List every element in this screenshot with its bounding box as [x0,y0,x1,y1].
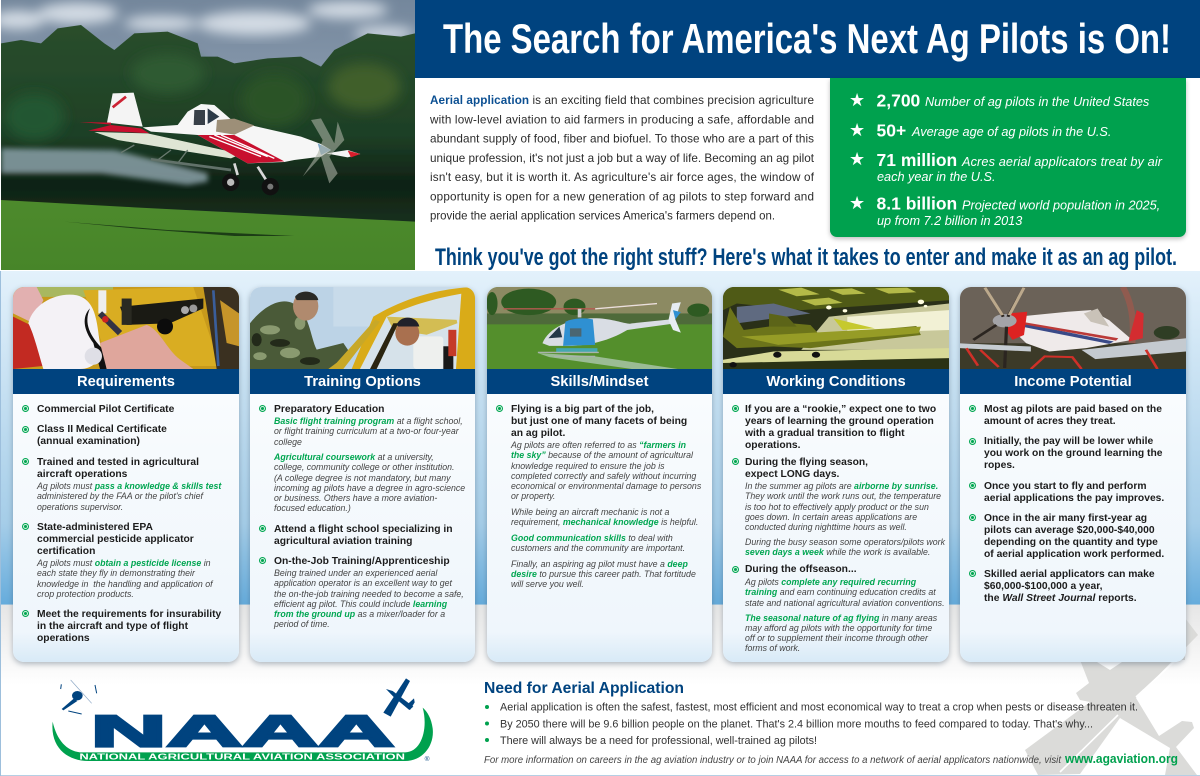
item: Once you start to fly and perform [984,480,1146,492]
item: Class II Medical Certificate [37,424,167,435]
item [969,480,1164,504]
item: an ag pilot. [511,428,565,438]
bullet list: There will always be a need for professional, well-trained ag pilots! [500,735,817,747]
item [732,456,868,480]
detail: desire to pursue this career path. That fortitude [511,569,696,579]
footer note: For more information on careers in the ag aviation industry or to join NAAA for access to a network of aerial applicators nationwide, visit [484,755,1062,766]
intro paragraph: Aerial application is an exciting field that combines precision agriculture [430,94,814,107]
item: Initially, the pay will be lower while [984,436,1153,447]
stat: 50+ [849,120,1111,141]
detail: Finally, an aspiring ag pilot must have a deep [511,558,688,568]
detail [36,481,222,512]
intro paragraph: with low-level aviation to aid farmers in producing a safe, affordable and [429,113,814,126]
heading: Working Conditions [766,374,906,390]
detail: or flight training curriculum at a two-or four-year [274,426,459,436]
detail [510,440,701,501]
detail: Being trained under an experienced aerial [274,568,437,578]
detail: each state they fly in demonstrating their [37,568,195,578]
item: expect LONG days. [745,468,839,480]
heading [250,369,475,394]
detail [511,532,685,553]
hero photo: ag plane spraying a field [1,0,415,270]
item: Flying is a big part of the job, [511,404,654,414]
detail: college [274,437,302,447]
detail: administered by the FAA or the pilot's chief [37,491,203,501]
detail: Ag pilots must obtain a pesticide license in [37,558,211,568]
intro paragraph: isn't easy, but it is worth it. As agriculture's air force ages, the window of [430,171,815,184]
heading: Need for Aerial Application [484,680,684,697]
detail [274,568,464,629]
detail: application operator is an excellent way to get [274,578,452,588]
item: you work on the ground learning the [984,448,1162,459]
detail: Ag pilots are often referred to as “farmers in [511,440,686,450]
item: Meet the requirements for insurability [37,608,221,620]
item: ropes. [984,460,1015,471]
stat: 71 million: Acres aerial applicators treat by air [961,155,1163,169]
stat: 2,700 [849,90,1150,111]
bullet list: Aerial application is often the safest, fastest, most efficient and most economical way to treat a crop when pests or disease threaten it. [500,702,1138,714]
item [969,404,1162,426]
item [496,404,687,438]
photo: hangar with planes [723,287,949,369]
photo: helicopter spraying [487,287,712,369]
item: operations [37,632,90,644]
item: agricultural aviation training [274,536,412,546]
item: but just one of many facets of being [511,416,687,426]
detail [511,507,698,527]
item: the Wall Street Journal reports. [984,592,1137,604]
item: If you are a “rookie,” expect one to two [745,404,936,414]
detail: knowledge required to ensure the job is [511,461,665,471]
detail: The seasonal nature of ag flying in many areas [745,612,937,622]
stat: 8.1 billion: ★ [849,193,865,214]
detail: goes down. In certain areas applications are [745,512,917,522]
detail: the on-the-job training needed to become a safe, [274,589,464,599]
detail: focused education.) [274,503,351,513]
spray [1,148,208,185]
detail: college, community college or other institution. [274,462,454,472]
detail: incoming ag pilots have a degree in agro-science [274,483,465,493]
item: in the aircraft and type of flight [37,620,188,632]
detail: training and earn continuing education credits at [745,587,936,597]
item: Trained and tested in agricultural [37,456,199,468]
detail: They work until the work runs out, the temperature [745,491,941,501]
detail: crop protection products. [37,589,134,599]
detail: will serve you well. [511,579,584,589]
logo swoosh [52,708,433,761]
item: operations. [745,440,800,450]
detail: In the summer ag pilots are airborne by sunrise. [745,481,938,491]
photo: instructor and student [250,287,475,369]
stat: 71 million: each year in the U.S. [877,170,995,184]
item: Preparatory Education [274,404,384,414]
intro paragraph: abundant supply of food, fiber and biofuel. To those who are a part of this [430,133,814,146]
detail: During the busy season some operators/pilots work [745,537,945,547]
heading: Skills/Mindset [551,374,648,390]
detail: Ag pilots complete any required recurring [745,577,916,587]
item: commercial pesticide applicator [37,534,194,544]
icon: airplane [383,678,415,717]
detail: or property. [511,491,555,501]
item [969,512,1164,560]
panel: working conditions [723,287,949,662]
item: $60,000-$100,000 a year, [984,580,1103,592]
detail: the sky” because of the amount of agricultural [511,450,693,460]
item: Once in the air many first-year ag [984,512,1147,524]
detail: Ag pilots must pass a knowledge & skills test [37,481,221,491]
item: aerial applications the pay improves. [984,492,1164,504]
detail [744,577,945,608]
detail: Agricultural coursework at a university, [274,452,434,462]
panel: requirements [13,287,239,662]
intro paragraph: opportunity is open for a new generation of ag pilots to step forward and [430,190,814,203]
item: amount of acres they treat. [984,416,1116,426]
item: State-administered EPA [37,522,153,532]
heading [723,369,949,394]
detail: period of time. [274,619,330,629]
item [969,568,1155,604]
detail: may afford ag pilots with the opportunity for time [745,623,932,633]
logo letters: NAAA [91,707,394,756]
detail: Good communication skills to deal with [511,532,673,542]
intro paragraph: unique profession, it's not just a job but a way of life. Becoming an ag pilot [430,152,815,165]
detail: is too hot to effectively apply product or the sun [745,502,929,512]
stat: 71 million: ★ [849,149,865,170]
detail: forms of work. [745,643,800,653]
icon: helicopter [61,680,97,714]
item: (annual examination) [37,436,140,447]
detail: operations supervisor. [37,502,123,512]
stat: 8.1 billion: 8.1 billion [876,194,957,214]
item: certification [37,546,95,556]
item: During the flying season, [745,456,868,468]
photo: cockpit with helmet [13,287,239,369]
detail: from the ground up as a mixer/loader for a [274,609,445,619]
item: years of learning the ground operation [745,416,934,426]
title banner [415,0,1200,78]
detail: knowledge in the handling and application of [37,579,213,589]
detail: economical or environmental damage to persons [511,481,701,491]
detail: conducted during nighttime hours as well. [745,522,907,532]
heading: Training Options [304,374,421,390]
bullet list: By 2050 there will be 9.6 billion people on the planet. That's 2.4 billion more mouths to feed compared to today. That's why... [500,718,1093,730]
detail: efficient ag pilot. This could include learning [274,599,447,609]
stat: 50+: 50+ [876,120,906,140]
detail: state and national agricultural aviation conventions. [745,598,945,608]
heading [13,369,239,394]
item: During the offseason... [745,564,857,575]
plane [79,93,360,195]
intro paragraph [429,94,815,222]
stat: 2,700: ★ [849,90,865,111]
detail [745,537,946,557]
stat: 8.1 billion: Projected world population in 2025, [962,198,1160,212]
item: pilots can average $20,000-$40,000 [984,524,1155,536]
item [969,436,1162,471]
item: aircraft operations [37,468,127,480]
stat: 8.1 billion [849,193,1160,228]
panel: skills/mindset [487,287,712,662]
item: with a gradual transition to flight [745,428,905,438]
heading [960,369,1186,394]
detail [745,481,941,532]
bullet list [485,702,1138,747]
panel: income potential [960,287,1186,662]
stat: 50+: ★ [849,120,865,141]
detail: off or to supplement their income through other [745,633,928,643]
NAAA logo [40,670,450,774]
heading: Income Potential [1014,374,1132,390]
detail [274,452,465,513]
photo: white ag plane at dusk [960,287,1186,369]
stat: 71 million [849,149,1163,184]
detail: customers and the community are important. [511,543,685,553]
stat: 50+: Average age of ag pilots in the U.S. [911,125,1111,139]
page background [0,271,1200,776]
item [22,522,194,556]
item [732,404,936,450]
detail [511,558,696,589]
registered mark: ® [425,755,430,763]
stat: 71 million: 71 million [876,150,957,170]
item: depending on the quantity and type [984,536,1158,548]
item [259,524,452,546]
detail: (A college degree is not mandatory, but many [274,473,451,483]
item [22,424,167,447]
detail: While being an aircraft mechanic is not a [511,507,669,517]
item: Skilled aerial applicators can make [984,568,1155,580]
detail: requirement, mechanical knowledge is helpful. [511,517,698,527]
item [22,608,222,644]
item: Commercial Pilot Certificate [37,404,174,414]
detail: completed correctly and safely without incurring [511,471,696,481]
detail [745,612,937,653]
intro paragraph: provide the aerial application services America's farmers depend on. [430,210,775,222]
stat: 2,700: Number of ag pilots in the United States [925,95,1150,109]
item: of aerial application work performed. [984,548,1164,560]
heading [487,369,712,394]
heading: Requirements [77,374,175,390]
detail [36,558,214,599]
need for aerial application [475,672,1200,774]
detail: Basic flight training program at a flight school, [274,416,463,426]
item: On-the-Job Training/Apprenticeship [274,556,450,566]
stat: 8.1 billion: up from 7.2 billion in 2013 [877,214,1022,228]
detail: or business. Others have a more aviation- [274,493,437,503]
stats panel [830,78,1186,237]
item [22,456,199,480]
website: www.agaviation.org [1064,752,1178,766]
stat: 2,700: 2,700 [876,90,921,110]
item: Most ag pilots are paid based on the [984,404,1162,414]
item: Attend a flight school specializing in [274,524,452,534]
detail: seven days a week while the work is available. [745,547,930,557]
detail [274,416,463,447]
logo name: NATIONAL AGRICULTURAL AVIATION ASSOCIATION [79,751,405,761]
panel: training options [250,287,475,662]
watermark plane [1025,620,1198,775]
